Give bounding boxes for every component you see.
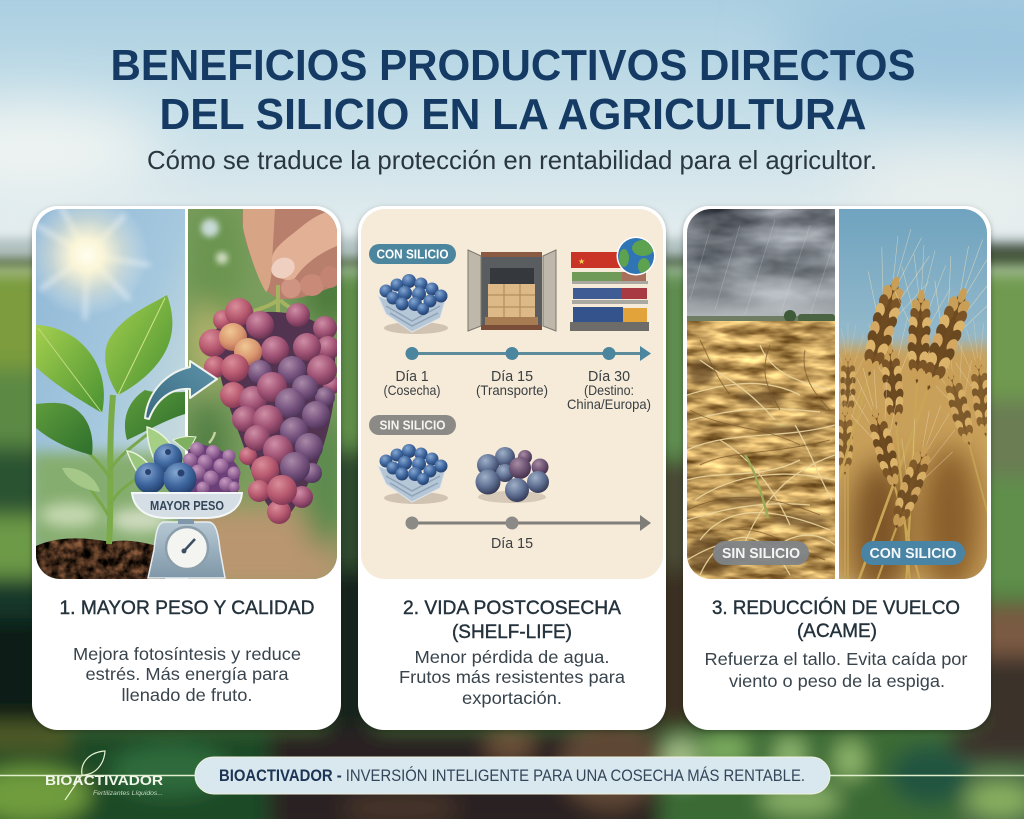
body text: exportación. bbox=[462, 688, 562, 708]
body text: Menor pérdida de agua. bbox=[414, 647, 610, 667]
title bbox=[110, 41, 916, 139]
body text: viento o peso de la espiga. bbox=[729, 671, 945, 691]
footer banner bbox=[195, 757, 1024, 794]
icon: shipping container bbox=[468, 250, 556, 331]
heading: 3. REDUCCIÓN DE VUELCO bbox=[712, 597, 960, 619]
timeline: sin silicio bbox=[406, 515, 651, 552]
label: con silicio: CON SILICIO bbox=[870, 545, 957, 562]
body text: Frutos más resistentes para bbox=[399, 667, 625, 687]
icon: basket of fresh blueberries bbox=[378, 444, 448, 504]
heading bbox=[712, 597, 960, 642]
heading: (ACAME) bbox=[797, 621, 877, 642]
body text: Mejora fotosíntesis y reduce bbox=[73, 644, 301, 664]
body text: estrés. Más energía para bbox=[86, 664, 289, 684]
timeline: con silicio: China/Europa) bbox=[567, 396, 651, 412]
logo: bioactivador: BIOACTIVADOR bbox=[45, 772, 163, 788]
footer banner: BIOACTIVADOR - INVERSIÓN INTELIGENTE PARA UNA COSECHA MÁS RENTABLE. bbox=[219, 766, 805, 785]
timeline: sin silicio: Día 15 bbox=[491, 535, 533, 552]
grape bunch bbox=[199, 298, 341, 524]
icon: supermarket shelf and globe: ★ bbox=[578, 257, 585, 266]
title: DEL SILICIO EN LA AGRICULTURA bbox=[160, 90, 866, 139]
panel: vida postcosecha bbox=[358, 206, 666, 730]
label: con silicio: CON SILICIO bbox=[376, 246, 448, 262]
title: BENEFICIOS PRODUCTIVOS DIRECTOS bbox=[110, 41, 916, 90]
label: con silicio bbox=[861, 541, 965, 565]
label: sin silicio: SIN SILICIO bbox=[722, 545, 800, 562]
label: sin silicio: SIN SILICIO bbox=[380, 418, 446, 432]
body text bbox=[73, 644, 301, 705]
heading: (SHELF-LIFE) bbox=[452, 622, 572, 643]
icon: bruised blueberries bbox=[476, 447, 549, 503]
image: lodged wheat under storm bbox=[686, 209, 835, 579]
body text: llenado de fruto. bbox=[122, 685, 252, 705]
icon: basket of blueberries bbox=[378, 274, 448, 334]
timeline: con silicio: (Destino: bbox=[584, 382, 634, 398]
heading: 1. MAYOR PESO Y CALIDAD bbox=[60, 598, 314, 619]
image: upright wheat under blue sky bbox=[839, 209, 987, 579]
label: sin silicio bbox=[369, 415, 456, 435]
icon: scale with fruit: MAYOR PESO bbox=[150, 499, 224, 513]
body text bbox=[399, 647, 625, 708]
image: grape bunch and hand bbox=[188, 209, 337, 579]
heading: 2. VIDA POSTCOSECHA bbox=[403, 598, 621, 619]
icon: scale with fruit bbox=[127, 427, 242, 578]
body text bbox=[704, 649, 968, 691]
timeline: con silicio: Día 15 bbox=[491, 368, 533, 385]
icon: supermarket shelf and globe bbox=[570, 236, 656, 331]
timeline: con silicio bbox=[384, 346, 651, 412]
body text: Refuerza el tallo. Evita caída por bbox=[704, 649, 968, 669]
logo: bioactivador: Fertilizantes Líquidos... bbox=[93, 791, 163, 797]
timeline: con silicio: Día 30 bbox=[588, 368, 630, 385]
timeline: con silicio: (Cosecha) bbox=[384, 382, 440, 398]
timeline: con silicio: Día 1 bbox=[396, 368, 428, 385]
image: plant in the sun bbox=[36, 209, 185, 579]
icon: hand holding the stem bbox=[242, 209, 340, 299]
logo: bioactivador bbox=[0, 751, 195, 800]
label: con silicio bbox=[369, 244, 456, 264]
heading bbox=[403, 598, 621, 643]
timeline: con silicio: (Transporte) bbox=[476, 382, 548, 398]
panel: reduccion de vuelco bbox=[680, 204, 994, 734]
label: sin silicio bbox=[713, 541, 809, 565]
panel: mayor peso y calidad bbox=[25, 193, 360, 730]
icon: curved arrow bbox=[145, 361, 217, 419]
subtitle: Cómo se traduce la protección en rentabilidad para el agricultor. bbox=[147, 145, 877, 175]
